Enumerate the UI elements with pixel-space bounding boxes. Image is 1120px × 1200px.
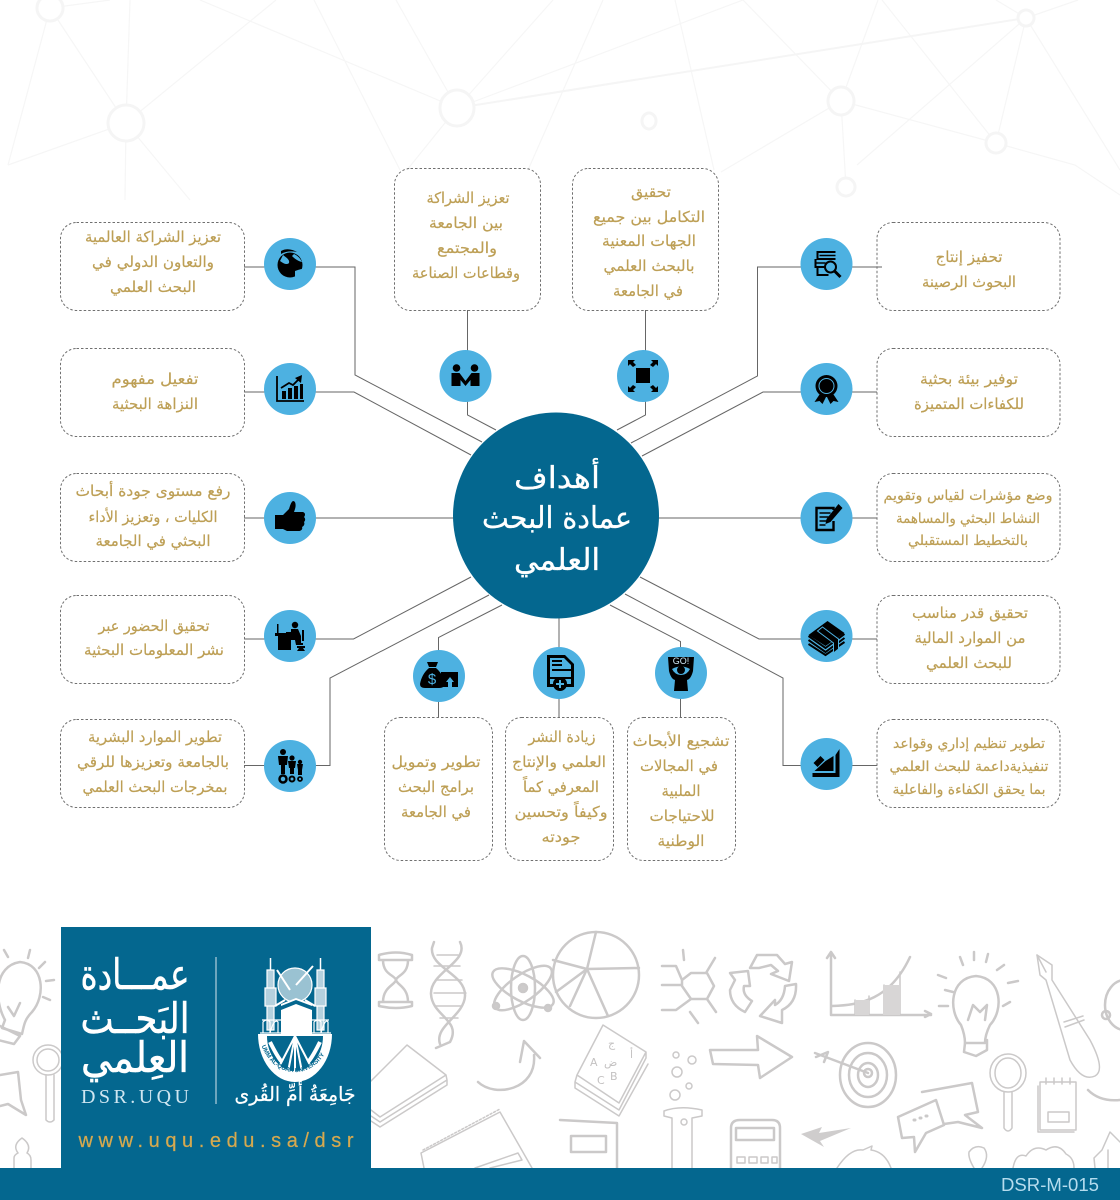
panel: integration [572, 168, 718, 310]
icon: thumbs up [264, 492, 316, 544]
panel: publishing: جودته [542, 828, 580, 846]
panel: indicators [877, 474, 1060, 562]
panel: partnership with community [394, 168, 540, 310]
panel: indicators: بالتخطيط المستقبلي [908, 533, 1028, 549]
icon: person at desk [264, 610, 316, 662]
doodle: fountain pen [1037, 955, 1099, 1077]
panel: indicators: النشاط البحثي والمساهمة [896, 511, 1040, 527]
panel: global partnership: البحث العلمي [110, 278, 196, 297]
central circle: title: عمادة البحث [482, 501, 632, 536]
panel: programs funding: برامج البحث [398, 778, 474, 796]
doodle: letter book: ج [608, 1037, 616, 1050]
doodle: notebook left [371, 1045, 447, 1127]
doodle: DNA helix [431, 942, 466, 1048]
panel: research quality: رفع مستوى جودة أبحاث [76, 481, 230, 500]
panel: integration: تحقيق [631, 183, 671, 201]
icon: globe [264, 238, 316, 290]
central circle: title: أهداف [514, 457, 600, 496]
icon: document with seal [533, 647, 585, 699]
doodle: right atom [1102, 980, 1120, 1030]
panel: administration: بما يحقق الكفاءة والفاعلية [892, 782, 1046, 798]
doodle: letter book: A [590, 1056, 598, 1069]
doodle: spiral notepad [421, 1109, 532, 1168]
icon: handshake [440, 350, 492, 402]
panel: presence: تحقيق الحضور عبر [98, 617, 210, 635]
divider [215, 957, 217, 1104]
panel: research integrity [60, 348, 244, 436]
doodle: magnifier right [990, 1054, 1026, 1131]
panel: research environment: توفير بيئة بحثية [920, 370, 1018, 388]
panel: global partnership: والتعاون الدولي في [92, 253, 214, 272]
icon: notes and pencil [800, 492, 852, 544]
panel: encouraging research: تشجيع الأبحاث [632, 731, 730, 750]
doodle: stamp [14, 1138, 31, 1168]
icon: people with gears [264, 740, 316, 792]
panel: research environment [877, 348, 1060, 436]
doodle: notebook bottom [560, 1120, 617, 1168]
panel: human resources [60, 720, 244, 808]
icon: money bag and house [413, 650, 465, 702]
doodle: target [815, 1043, 896, 1107]
icon: stack of cash [800, 610, 852, 662]
footer code: DSR-M-015 [1001, 1175, 1099, 1195]
panel: integration: التكامل بين جميع [593, 208, 705, 226]
connector lines [244, 267, 882, 766]
panel: encouraging research [628, 718, 736, 860]
panel: stimulate research: البحوث الرصينة [922, 273, 1016, 291]
panel: encouraging research: للاحتياجات [650, 807, 714, 825]
doodle: left arrow [801, 1127, 851, 1147]
university emblem: UMM AL-QURA UNIVERSITY [262, 1044, 324, 1072]
panel: publishing: المعرفي كماً [522, 776, 599, 797]
doodle: leaf [1094, 1132, 1120, 1168]
doodle: letter book: ض [604, 1056, 617, 1069]
central circle: title [453, 412, 659, 618]
doodle: line chart [827, 952, 931, 1017]
panel: presence: نشر المعلومات البحثية [84, 641, 224, 659]
panel: global partnership: تعزيز الشراكة العالمية [85, 228, 221, 246]
panel: partnership with community: وقطاعات الصناعة [412, 264, 520, 282]
panel: global partnership [60, 222, 244, 310]
panel: programs funding: تطوير وتمويل [392, 753, 480, 771]
footer bar [0, 1168, 1120, 1200]
icon: award ribbon [800, 363, 852, 415]
doodle: smile arc [1088, 1090, 1120, 1100]
doodle: left bulb [0, 950, 54, 1044]
icon: expand arrows [617, 350, 669, 402]
panel: stimulate research: تحفيز إنتاج [936, 248, 1002, 267]
panel: presence [60, 596, 244, 684]
panel: encouraging research: في المجالات [640, 757, 718, 776]
icon: books with magnifier [800, 238, 852, 290]
doodle: left magnifier [33, 1045, 63, 1122]
doodle: hexagons [662, 950, 716, 1023]
university emblem [258, 958, 332, 1082]
panel: partnership with community: بين الجامعة [429, 214, 503, 232]
panel: deanship logo block [61, 927, 371, 1168]
doodle: flask and bubbles [664, 1052, 702, 1168]
panel: research environment: للكفاءات المتميزة [914, 395, 1024, 413]
icon: go sign [655, 647, 707, 699]
doodle: letter book: B [610, 1070, 618, 1083]
panel: publishing: العلمي والإنتاج [512, 753, 606, 772]
deanship name: عمـــادة [80, 950, 190, 999]
panel: research quality: البحثي في الجامعة [96, 532, 210, 551]
doodle: small bulb outline [969, 1147, 987, 1168]
doodle: letter book: أ [630, 1047, 633, 1061]
icon: rising bar chart [264, 363, 316, 415]
panel: programs funding: في الجامعة [401, 803, 471, 822]
panel: publishing: زيادة النشر [528, 728, 596, 746]
panel: integration: الجهات المعنية [602, 232, 696, 250]
doodle: atom [487, 956, 559, 1020]
university name: جَامِعَةُ أمِّ القُرى [234, 1081, 356, 1106]
doodle: letter book: C [597, 1074, 605, 1087]
doodle: right bulb [938, 952, 1018, 1056]
panel: human resources: بالجامعة وتعزيزها للرقي [77, 753, 229, 772]
deanship name: العِلمي [81, 1033, 189, 1083]
background network pattern [8, 0, 1120, 200]
doodle: apple [837, 1146, 891, 1168]
doodle: pie chart [553, 932, 639, 1018]
panel: research integrity: تفعيل مفهوم [112, 370, 198, 388]
panel: human resources: تطوير الموارد البشرية [88, 728, 222, 746]
panel: integration: في الجامعة [613, 282, 683, 301]
panel: programs funding [384, 718, 492, 860]
doodle: hourglass [379, 952, 412, 1008]
central circle: title: العلمي [514, 543, 600, 578]
panel: research quality [60, 474, 244, 562]
panel: research quality: الكليات ، وتعزيز الأداء [88, 507, 218, 526]
icon: money bag and house: $ [428, 671, 437, 688]
panel: publishing: وكيفاً وتحسين [514, 801, 608, 821]
panel: stimulate research [877, 222, 1060, 310]
panel: publishing [506, 718, 614, 860]
panel: financial resources: للبحث العلمي [926, 654, 1012, 673]
panel: encouraging research: الوطنية [658, 832, 704, 850]
doodle: recycle arrows [730, 955, 796, 1023]
panel: administration [877, 720, 1060, 808]
doodle: cloud [1013, 1147, 1074, 1168]
panel: partnership with community: والمجتمع [437, 239, 497, 257]
panel: research integrity: النزاهة البحثية [112, 395, 198, 413]
doodle: left speech bubble [0, 1072, 26, 1115]
panel: integration: بالبحث العلمي [604, 257, 694, 276]
panel: financial resources [877, 596, 1060, 684]
doodle: speech bubbles [898, 1083, 982, 1152]
deanship name [80, 950, 190, 1108]
panel: human resources: بمخرجات البحث العلمي [82, 778, 228, 797]
doodle: calculator [731, 1120, 780, 1168]
doodle: arrow 3D [710, 1036, 792, 1078]
deanship name: DSR.UQU [81, 1086, 190, 1108]
panel: financial resources: تحقيق قدر مناسب [912, 604, 1028, 622]
doodle: letter book [575, 1025, 648, 1116]
icon: ruler triangle chart [800, 738, 852, 790]
panel: encouraging research: الملبية [662, 782, 700, 800]
doodle: curved arrow [478, 1041, 540, 1090]
panel: indicators: وضع مؤشرات لقياس وتقويم [884, 488, 1052, 504]
panel: administration: تنفيذيةداعمة للبحث العلمي [890, 759, 1049, 775]
doodle background strip [0, 932, 1120, 1168]
panel: administration: تطوير تنظيم إداري وقواعد [893, 736, 1045, 752]
doodle: notepad right [1038, 1078, 1076, 1132]
panel: financial resources: من الموارد المالية [914, 629, 1026, 647]
deanship name: البَحــث [80, 994, 190, 1043]
panel: partnership with community: تعزيز الشراكة [426, 189, 510, 207]
website url: www.uqu.edu.sa/dsr [78, 1130, 354, 1152]
icon: go sign: GO! [673, 656, 689, 666]
